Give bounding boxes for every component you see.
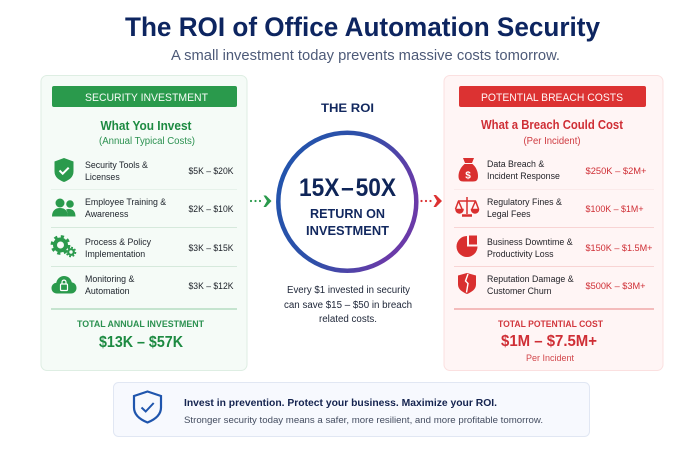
total: annual investment xyxy=(77,319,204,351)
heading: what a breach could cost: What a Breach Could Cost xyxy=(481,118,624,132)
header: security investment xyxy=(52,86,237,107)
row: reputation damage: $500K – $3M+ xyxy=(586,281,646,291)
panel: security investment xyxy=(41,76,247,370)
row: process and policy: Process & Policy xyxy=(85,237,152,247)
header: security investment: SECURITY INVESTMENT xyxy=(85,92,208,104)
callout: Stronger security today means a safer, more resilient, and more profitable tomorrow. xyxy=(184,415,543,425)
row: security tools: $5K – $20K xyxy=(188,166,234,176)
roi circle xyxy=(278,133,416,271)
row: employee training xyxy=(52,197,234,219)
total: potential cost: $1M – $7.5M+ xyxy=(501,333,597,350)
heading: what you invest: What You Invest xyxy=(100,119,192,133)
panel: potential breach costs xyxy=(444,76,663,370)
roi explanation xyxy=(284,285,412,325)
row: business downtime: Business Downtime & xyxy=(487,237,573,247)
header: potential breach costs xyxy=(459,86,646,107)
arrow: investment to roi xyxy=(250,196,272,207)
icon: money bag: $ xyxy=(465,170,471,182)
icon: scales xyxy=(456,197,478,216)
row: process and policy: Implementation xyxy=(85,249,145,259)
row: employee training: Employee Training & xyxy=(85,197,166,207)
row: employee training: Awareness xyxy=(85,209,129,219)
arrow: roi to breach costs xyxy=(420,195,442,207)
icon: cracked shield xyxy=(458,273,476,294)
row: employee training: $2K – $10K xyxy=(188,204,234,214)
subheading: per incident: (Per Incident) xyxy=(524,136,580,147)
total: potential cost xyxy=(498,319,603,364)
icon: cloud lock xyxy=(52,276,76,294)
row: process and policy: $3K – $15K xyxy=(188,243,234,253)
row: data breach xyxy=(458,158,646,182)
icon: pie chart xyxy=(457,236,478,257)
subheading: annual typical costs: (Annual Typical Costs) xyxy=(99,136,195,147)
row: security tools: Security Tools & xyxy=(85,160,148,170)
total: potential cost: TOTAL POTENTIAL COST xyxy=(498,319,603,329)
row: data breach: Data Breach & xyxy=(487,159,544,169)
roi circle: 15X – 50X xyxy=(299,174,396,202)
header: potential breach costs: POTENTIAL BREACH COSTS xyxy=(481,92,623,104)
roi explanation: Every $1 invested in security xyxy=(287,285,410,296)
total: annual investment: TOTAL ANNUAL INVESTMENT xyxy=(77,319,204,329)
icon: gears xyxy=(52,236,76,256)
icon: money bag xyxy=(458,158,478,182)
callout: Invest in prevention. Protect your business. Maximize your ROI. xyxy=(184,398,497,409)
row: data breach: $250K – $2M+ xyxy=(586,166,646,176)
heading: the roi: THE ROI xyxy=(321,101,374,115)
row: monitoring: Monitoring & xyxy=(85,274,135,284)
row: security tools: Licenses xyxy=(85,172,120,182)
row: data breach: Incident Response xyxy=(487,171,560,181)
roi explanation: related costs. xyxy=(319,314,377,325)
row: regulatory fines: Regulatory Fines & xyxy=(487,197,562,207)
roi explanation: can save $15 – $50 in breach xyxy=(284,300,412,311)
total: annual investment: $13K – $57K xyxy=(99,334,183,351)
icon: shield check outline xyxy=(134,392,161,422)
roi circle: RETURN ON xyxy=(310,207,385,221)
row: regulatory fines xyxy=(456,197,644,219)
title: The ROI of Office Automation Security xyxy=(125,12,600,42)
row: reputation damage: Customer Churn xyxy=(487,286,552,296)
icon: people xyxy=(52,198,76,216)
row: monitoring xyxy=(52,274,234,296)
row: monitoring: Automation xyxy=(85,286,130,296)
row: business downtime xyxy=(457,236,652,259)
subtitle: A small investment today prevents massive costs tomorrow. xyxy=(171,47,560,64)
icon: shield check xyxy=(54,158,74,182)
total: potential cost: Per Incident xyxy=(526,353,574,364)
row: regulatory fines: $100K – $1M+ xyxy=(586,204,644,214)
row: regulatory fines: Legal Fees xyxy=(487,209,531,219)
row: monitoring: $3K – $12K xyxy=(188,281,234,291)
row: process and policy xyxy=(52,236,234,259)
row: reputation damage: Reputation Damage & xyxy=(487,274,574,284)
row: reputation damage xyxy=(458,273,646,296)
row: business downtime: Productivity Loss xyxy=(487,249,554,259)
row: security tools xyxy=(54,158,234,182)
row: business downtime: $150K – $1.5M+ xyxy=(586,243,652,253)
roi circle: INVESTMENT xyxy=(306,224,389,238)
callout xyxy=(114,382,590,436)
